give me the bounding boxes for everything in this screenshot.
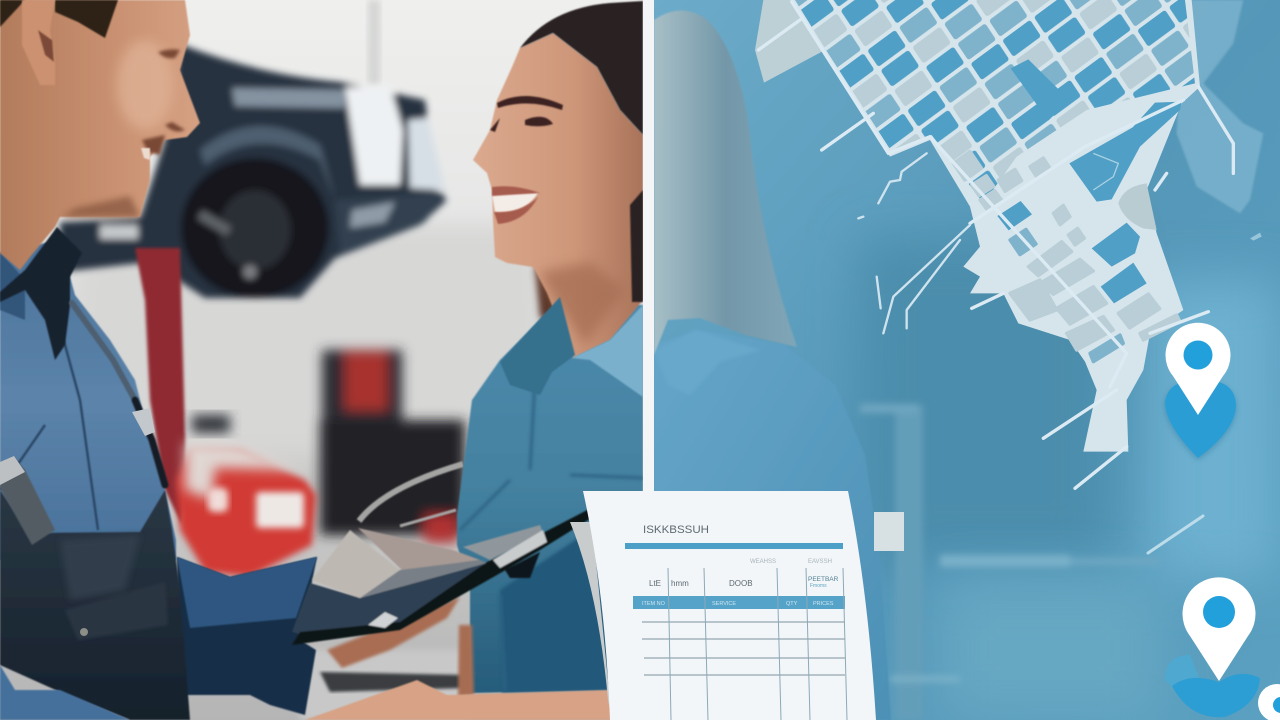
band labels: QTY — [786, 601, 798, 607]
woman collar — [500, 297, 643, 397]
land main — [792, 0, 1200, 452]
table header band — [633, 596, 845, 609]
paper sheet — [583, 491, 876, 720]
woman neck and face — [473, 33, 643, 358]
woman brow, eye and nose shadow — [490, 96, 563, 132]
apron strap — [72, 303, 165, 485]
mechanic lower arm — [177, 557, 317, 715]
pin 2 white marker — [1182, 577, 1256, 681]
apron pocket flap — [65, 582, 168, 640]
woman hair — [520, 1, 643, 302]
lower sleeve — [0, 665, 130, 720]
pin 1 white marker — [1166, 323, 1230, 415]
table header labels: Fmoms — [810, 583, 827, 589]
jaw shadow — [62, 196, 140, 217]
side tab — [874, 512, 904, 551]
woman hand under clipboard — [327, 597, 460, 668]
band labels — [642, 601, 834, 607]
silhouette hair — [654, 10, 797, 355]
waterfront pier — [858, 153, 970, 333]
clipboard highlight — [368, 612, 398, 628]
pin 2 pale halo — [1165, 655, 1200, 690]
shirt folds — [460, 392, 643, 530]
document title: ISKKBSSUH — [643, 524, 709, 536]
mechanic eye, nostril and smile — [142, 49, 185, 155]
street map — [755, 0, 1263, 488]
gray blocks south — [953, 151, 1180, 350]
faded land east — [1177, 0, 1263, 213]
clasped hands — [305, 680, 612, 720]
mechanic collar — [0, 227, 82, 360]
table grid — [642, 568, 847, 720]
lagoon inner lines — [1093, 153, 1118, 190]
clipboard chrome clip — [493, 530, 547, 568]
apron — [0, 490, 190, 720]
location pin 3 — [1258, 684, 1280, 720]
table header labels: DOOB — [729, 579, 753, 588]
table header labels — [649, 576, 839, 589]
location pin 1 — [1165, 323, 1236, 458]
clipboard silver facets — [312, 530, 400, 598]
main avenues — [758, 2, 1233, 488]
mechanic shirt — [0, 240, 176, 560]
red tool chest and cabinet — [320, 350, 465, 543]
land north-west — [755, 0, 825, 83]
clipboard black edge — [292, 507, 593, 645]
table header labels: PEETBAR — [808, 576, 839, 583]
mechanic neck and face — [0, 0, 200, 270]
pliers in pocket — [0, 457, 55, 545]
offshore line — [1148, 516, 1203, 553]
band labels: SERVICE — [712, 601, 736, 607]
pin 2 blue base — [1172, 674, 1260, 717]
band labels: PRICES — [813, 601, 834, 607]
woman smile — [492, 193, 538, 212]
column captions — [750, 559, 832, 565]
large blue lagoon — [1069, 102, 1182, 202]
pin 2 dot — [1203, 596, 1235, 628]
round gray land — [1118, 183, 1157, 230]
mid blue blocks south — [1010, 229, 1123, 362]
shirt lower dark panel — [500, 530, 612, 693]
pin 1 dot — [1184, 340, 1212, 370]
blue background — [654, 0, 1280, 720]
silhouette collar — [654, 330, 760, 395]
hair behind neck — [530, 266, 552, 321]
city block grid — [795, 0, 1195, 203]
workshop background — [0, 0, 643, 720]
clipboard — [292, 507, 593, 645]
air hose — [359, 464, 463, 526]
woman silhouette — [654, 10, 891, 720]
column captions: EAVSSH — [808, 559, 832, 565]
column captions: WEAHSS — [750, 559, 776, 565]
apron bib shading — [60, 535, 140, 600]
clipboard dark blob — [505, 552, 540, 578]
tall blue block — [1011, 59, 1069, 121]
mechanic — [0, 0, 317, 720]
neck shadow — [540, 262, 625, 345]
mechanic hair — [0, 0, 118, 38]
floor under hands — [320, 672, 465, 692]
pocket button — [80, 628, 88, 636]
pin 1 blue teardrop — [1165, 380, 1236, 458]
faded shelving — [860, 404, 1160, 720]
lifted car — [60, 44, 447, 298]
red car — [176, 415, 316, 577]
red lift post — [135, 248, 186, 525]
panel: map side — [654, 0, 1280, 720]
document — [570, 491, 904, 720]
forearm — [458, 625, 474, 698]
band labels: ITEM NO — [642, 601, 666, 607]
table header labels: hmm — [671, 579, 689, 588]
mechanic ear — [22, 0, 55, 85]
woman customer — [305, 1, 643, 720]
clipboard blue-gray underside — [292, 563, 487, 634]
face highlight — [117, 40, 173, 130]
shirt placket and fold — [0, 340, 100, 530]
divider — [643, 0, 654, 492]
location pin 2 — [1165, 577, 1260, 717]
table header labels: LtE — [649, 579, 661, 588]
large blue blocks south — [1092, 223, 1140, 267]
woman shirt — [457, 300, 643, 693]
title rule — [625, 543, 843, 549]
strap buckle — [132, 408, 155, 436]
shirt shoulder dark — [0, 252, 25, 320]
silhouette shirt — [654, 330, 891, 720]
small pale reef — [1250, 233, 1262, 241]
back sheet — [570, 522, 612, 720]
panel: workshop photo — [0, 0, 643, 720]
